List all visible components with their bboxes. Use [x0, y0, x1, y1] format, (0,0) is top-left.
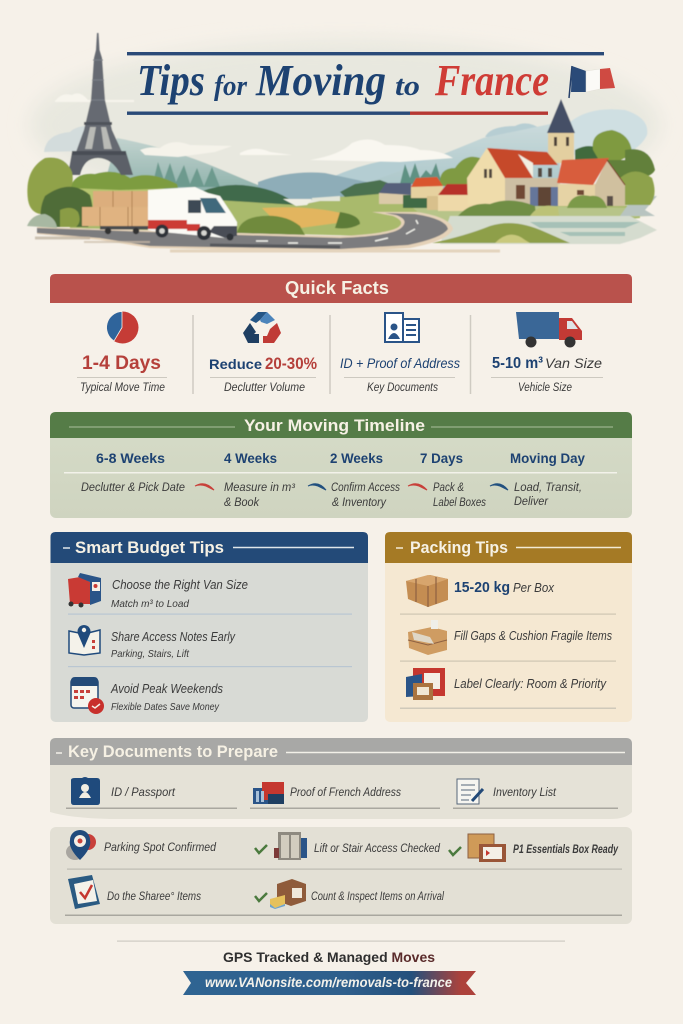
- treelines and fields: [200, 185, 297, 205]
- timeline step: 2 weeks: & Inventory: [332, 497, 387, 509]
- fact: declutter: Declutter Volume: [224, 382, 305, 394]
- footer tagline: GPS Tracked & Managed Moves: [223, 949, 435, 965]
- arrow: red: [195, 484, 214, 490]
- timeline step: 4 weeks: Measure in m³: [224, 482, 296, 494]
- check mark: [449, 847, 461, 855]
- icon: cardboard boxes: [82, 191, 148, 234]
- heading: moving timeline: [50, 412, 632, 438]
- item: count and inspect: [270, 879, 444, 909]
- timeline step: 2 weeks: Confirm Access: [331, 482, 400, 494]
- left trees: [27, 158, 73, 214]
- item: lift access: [274, 832, 440, 860]
- fact: move time: Typical Move Time: [80, 382, 165, 394]
- tip: access notes: Share Access Notes Early: [111, 629, 236, 644]
- timeline step: 4 weeks: & Book: [224, 497, 260, 509]
- fact: vehicle: Vehicle Size: [518, 382, 572, 394]
- fact: documents: Key Documents: [367, 382, 438, 394]
- timeline step: 7 days: [420, 450, 486, 509]
- item: lift access: Lift or Stair Access Checked: [314, 841, 440, 855]
- tip: label clearly: Label Clearly: Room & Priority: [454, 676, 607, 691]
- title banner: to: [395, 71, 420, 102]
- website ribbon: [183, 971, 476, 995]
- timeline step: moving day: [510, 450, 585, 508]
- check mark: [255, 893, 267, 901]
- document: ID passport: ID / Passport: [111, 785, 176, 799]
- heading: key documents: Key Documents to Prepare: [68, 742, 278, 761]
- fact: vehicle: Van Size: [545, 355, 602, 371]
- timeline step: moving day: Deliver: [514, 496, 549, 508]
- heading: quick facts: Quick Facts: [285, 278, 389, 298]
- hedges: [458, 200, 536, 216]
- right trees: [575, 146, 600, 165]
- timeline step: 2 weeks: 2 Weeks: [330, 450, 383, 466]
- item: shared items: [68, 875, 201, 909]
- road: [37, 212, 453, 252]
- water: [440, 216, 657, 244]
- document: proof of address: Proof of French Address: [290, 785, 401, 799]
- tip: van size: Choose the Right Van Size: [112, 577, 248, 592]
- timeline step: 4 weeks: [224, 450, 296, 509]
- fact: declutter: [209, 312, 317, 394]
- panel: smart budget tips: [50, 532, 368, 722]
- timeline step: 6-8 weeks: Declutter & Pick Date: [81, 482, 185, 494]
- panel: key documents: [50, 738, 632, 819]
- panel: moving timeline: [50, 412, 632, 518]
- fact: vehicle: 5-10 m³: [492, 355, 543, 372]
- timeline step: moving day: Load, Transit,: [514, 482, 582, 494]
- fact: vehicle: [491, 312, 603, 394]
- timeline step: 7 days: Label Boxes: [433, 497, 486, 509]
- title banner: Moving: [255, 56, 386, 105]
- timeline step: 4 weeks: 4 Weeks: [224, 450, 277, 466]
- fact: declutter: Reduce: [209, 356, 262, 372]
- document: ID passport: [66, 777, 237, 809]
- arrow: red: [408, 484, 427, 490]
- fact: move time: [77, 312, 167, 394]
- tip: access notes: Parking, Stairs, Lift: [111, 648, 190, 660]
- tip: cushion fragile items: [408, 620, 612, 655]
- tip: box weight: Per Box: [513, 580, 554, 595]
- tip: van size: [68, 573, 248, 610]
- item: count and inspect: Count & Inspect Items on Arrival: [311, 889, 444, 903]
- timeline step: moving day: Moving Day: [510, 450, 585, 466]
- heading: moving timeline: Your Moving Timeline: [244, 417, 425, 435]
- panel: quick facts: [50, 274, 632, 394]
- title banner: for: [214, 71, 248, 102]
- document: proof of address: [250, 782, 440, 809]
- tip: peak weekends: [71, 677, 223, 714]
- title banner: Tips: [137, 56, 205, 105]
- ground: [63, 186, 640, 238]
- panel: packing tips: [385, 532, 632, 722]
- icon: delivery van: [148, 187, 237, 240]
- tip: peak weekends: Flexible Dates Save Money: [111, 701, 220, 713]
- heading: key documents: [50, 738, 632, 765]
- tip: peak weekends: Avoid Peak Weekends: [110, 681, 223, 696]
- timeline step: 6-8 weeks: [81, 450, 185, 494]
- heading: packing tips: Packing Tips: [410, 538, 508, 557]
- tip: access notes: [69, 625, 236, 660]
- timeline step: 6-8 weeks: 6-8 Weeks: [96, 450, 165, 466]
- tip: van size: Match m³ to Load: [111, 598, 190, 610]
- icon: village with church: [379, 99, 625, 211]
- timeline step: 7 days: Pack &: [433, 482, 464, 494]
- arrow: blue: [308, 484, 326, 490]
- conifers: [152, 162, 220, 187]
- fact: documents: ID + Proof of Address: [340, 355, 460, 371]
- fact: declutter: 20-30%: [265, 354, 317, 373]
- timeline step: 2 weeks: [330, 450, 400, 509]
- tip: box weight: [406, 575, 554, 607]
- timeline step: 7 days: 7 Days: [420, 450, 463, 466]
- footer: [117, 940, 565, 995]
- tip: label clearly: [406, 668, 607, 700]
- far hills: [100, 138, 295, 200]
- heading: smart budget tips: [50, 532, 368, 563]
- fact: move time: 1-4 Days: [82, 353, 161, 374]
- fact: documents: [340, 313, 460, 394]
- document: inventory list: Inventory List: [493, 785, 557, 799]
- title banner: France: [434, 56, 549, 105]
- hero illustration: French landscape: [27, 33, 660, 252]
- item: essentials box: P1 Essentials Box Ready: [513, 842, 619, 856]
- tip: cushion fragile items: Fill Gaps & Cushion Fragile Items: [454, 628, 612, 643]
- item: parking spot: [66, 830, 216, 860]
- arrow: blue: [490, 484, 508, 490]
- title banner: [127, 52, 604, 115]
- icon: Eiffel tower: [68, 33, 133, 175]
- document: inventory list: [453, 779, 618, 809]
- panel: checklist: [50, 827, 632, 924]
- item: essentials box: [468, 834, 619, 862]
- icon: French flag: [569, 66, 615, 98]
- item: parking spot: Parking Spot Confirmed: [104, 840, 216, 854]
- heading: packing tips: [385, 532, 632, 563]
- website ribbon: www.VANonsite.com/removals-to-france: [205, 975, 452, 990]
- heading: smart budget tips: Smart Budget Tips: [75, 538, 224, 557]
- heading: quick facts: [50, 274, 632, 303]
- tip: box weight: 15-20 kg: [454, 579, 510, 596]
- check mark: [255, 845, 267, 853]
- item: shared items: Do the Sharee° Items: [107, 889, 201, 903]
